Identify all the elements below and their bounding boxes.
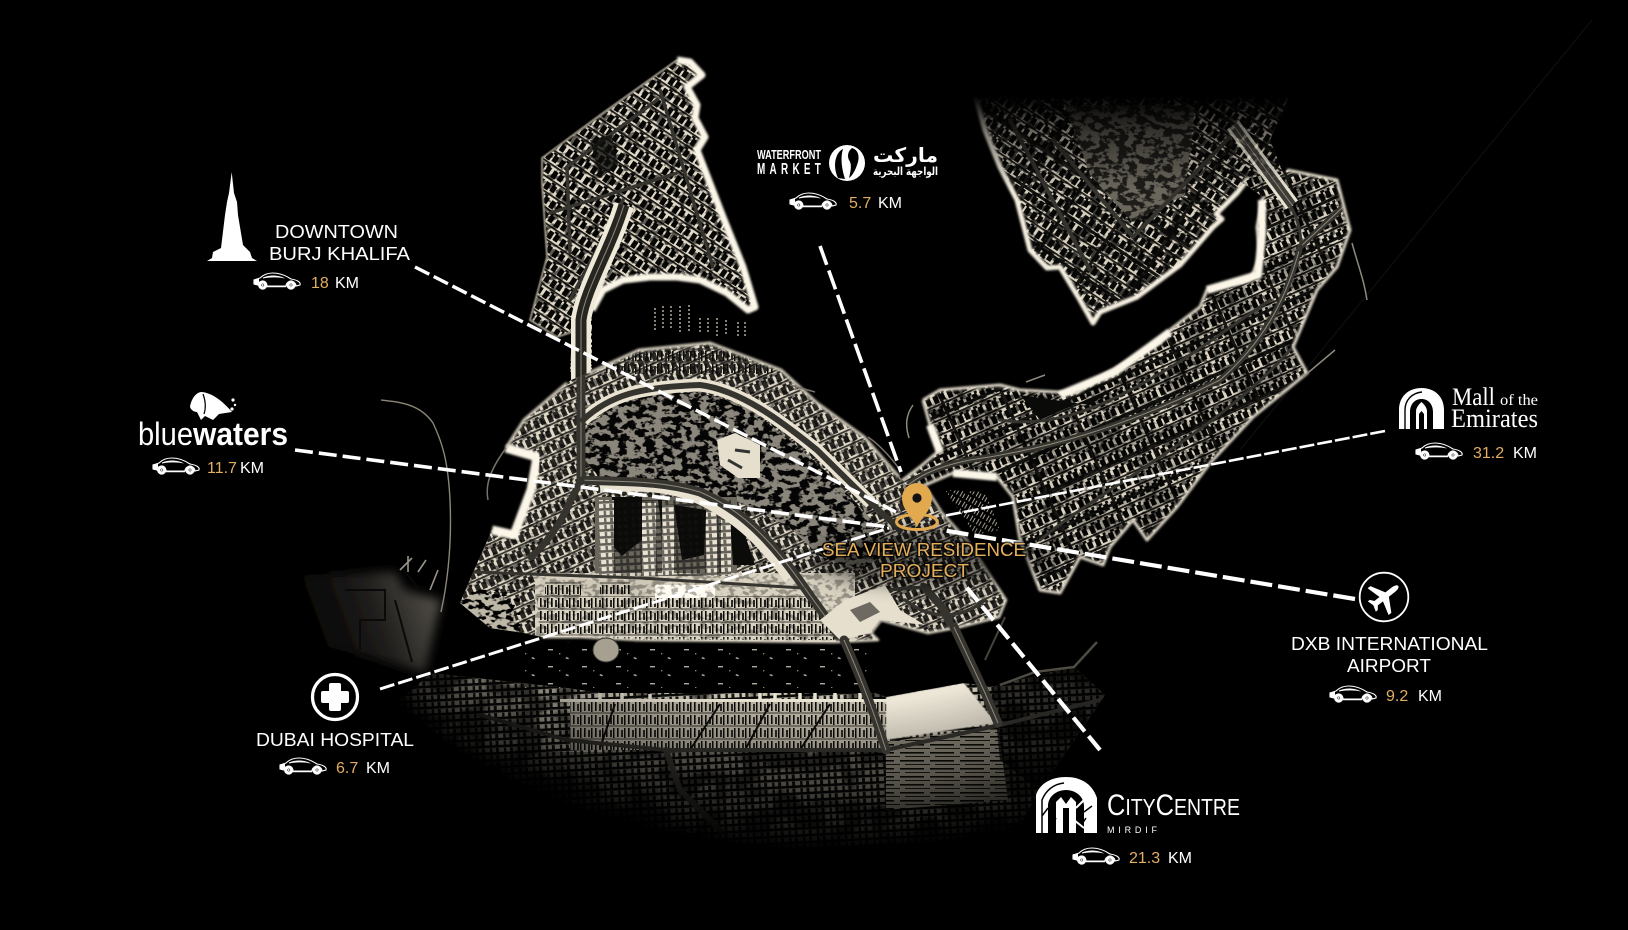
callout: Downtown Burj Khalifa: BURJ KHALIFA [269,244,410,264]
logo: arabic wordmark: ماركت [873,143,938,167]
dashed connector: Dubai Hospital [380,528,889,689]
icon: car [1330,686,1376,703]
distance: 18 [311,275,329,292]
distance: KM [1168,850,1192,867]
distance: KM [878,195,902,212]
icon: medical cross [312,674,358,720]
map: road shoulders [583,385,871,578]
logo: latin wordmark: WATERFRONT [757,148,821,162]
map: marina pier strokes [655,305,745,338]
dashed connector: Waterfront Market [820,246,901,472]
map: shadow behind project label [813,530,1037,586]
distance: 31.2 [1473,445,1504,462]
map: east residential land [885,160,1367,600]
project label [822,540,1026,581]
callout: DXB International Airport: AIRPORT [1347,656,1431,676]
project label: SEA VIEW RESIDENCE [822,540,1026,560]
callout: Downtown Burj Khalifa [207,172,410,292]
callout: Mall of the Emirates [1399,384,1538,462]
map: bridge road [1233,125,1292,205]
distance: 6.7 [336,760,358,777]
label: DUBAI HOSPITAL [256,730,414,750]
logo: arches [1399,388,1444,429]
icon: location pin [896,483,938,530]
icon: Burj Khalifa [207,172,257,261]
callout: DXB International Airport [1291,573,1488,705]
icon: fish [190,392,236,420]
satellite map [300,55,1367,862]
logo: wordmark: Mall [1452,384,1495,411]
map: port sand [820,585,925,640]
map: west cove trees [458,590,520,635]
logo: wordmark: of the [1500,392,1538,409]
map: marina near project [945,490,1000,535]
logo: wordmark: Emirates [1451,404,1538,433]
label: DOWNTOWN [275,222,398,242]
logo: wordmark [1451,384,1538,433]
icon: car [254,273,300,290]
distance: 21.3 [1129,850,1160,867]
callout: Waterfront Market: الواجهة البحرية [873,165,938,178]
dashed connector: Mall of the Emirates [943,431,1385,516]
distance: 5.7 [849,195,871,212]
map: block strips [595,497,755,576]
callout: bluewaters [138,392,288,477]
icon: car [790,193,836,210]
map: round islet [593,638,619,662]
callout: Waterfront Market: MARKET [757,160,821,178]
distance: KM [366,760,390,777]
logo: arches [1036,777,1097,833]
map: north island [525,55,760,385]
distance: KM [335,275,359,292]
label: DXB INTERNATIONAL [1291,634,1488,654]
map: central park [580,390,890,580]
distance: 11.7 [207,460,237,477]
map: south shore district [402,668,1105,843]
distance: 9.2 [1386,688,1408,705]
map: lower highways [844,617,1097,750]
dashed connector: DXB airport [942,530,1355,599]
callout: Waterfront Market [757,143,938,212]
dashed connector: City Centre [963,583,1100,750]
project label: PROJECT [880,561,969,581]
map: north residential crescent [605,348,775,374]
logo wordmark: blue [138,416,193,452]
map: boats in creek [520,642,870,688]
distance: KM [1513,445,1537,462]
callout: Dubai Hospital [256,674,414,777]
map: roads [473,374,987,642]
map: north-east peninsula [974,98,1288,327]
icon: car [152,458,199,475]
map: breakwater line [381,400,451,612]
distance: KM [1418,688,1442,705]
project location [822,483,1026,581]
icon: airplane [1360,573,1409,621]
map: west land fragment [300,556,441,672]
icon: car [1072,848,1119,865]
icon: car [280,758,326,775]
callout: bluewaters: waters [192,416,288,452]
logo: circle mark [829,145,865,181]
dashed connector: Downtown Burj Khalifa [415,267,896,512]
map: main island [455,340,1015,680]
icon: car [1416,443,1462,460]
logo: wordmark: CITYCENTRE [1107,789,1240,822]
faint diagonal road line [1240,20,1592,450]
callout: City Centre Mirdif [1036,777,1240,867]
callout: City Centre Mirdif: MIRDIF [1107,825,1158,835]
distance: KM [240,460,264,477]
map: southern grid district [535,573,855,643]
dashed connector: bluewaters [295,450,889,527]
